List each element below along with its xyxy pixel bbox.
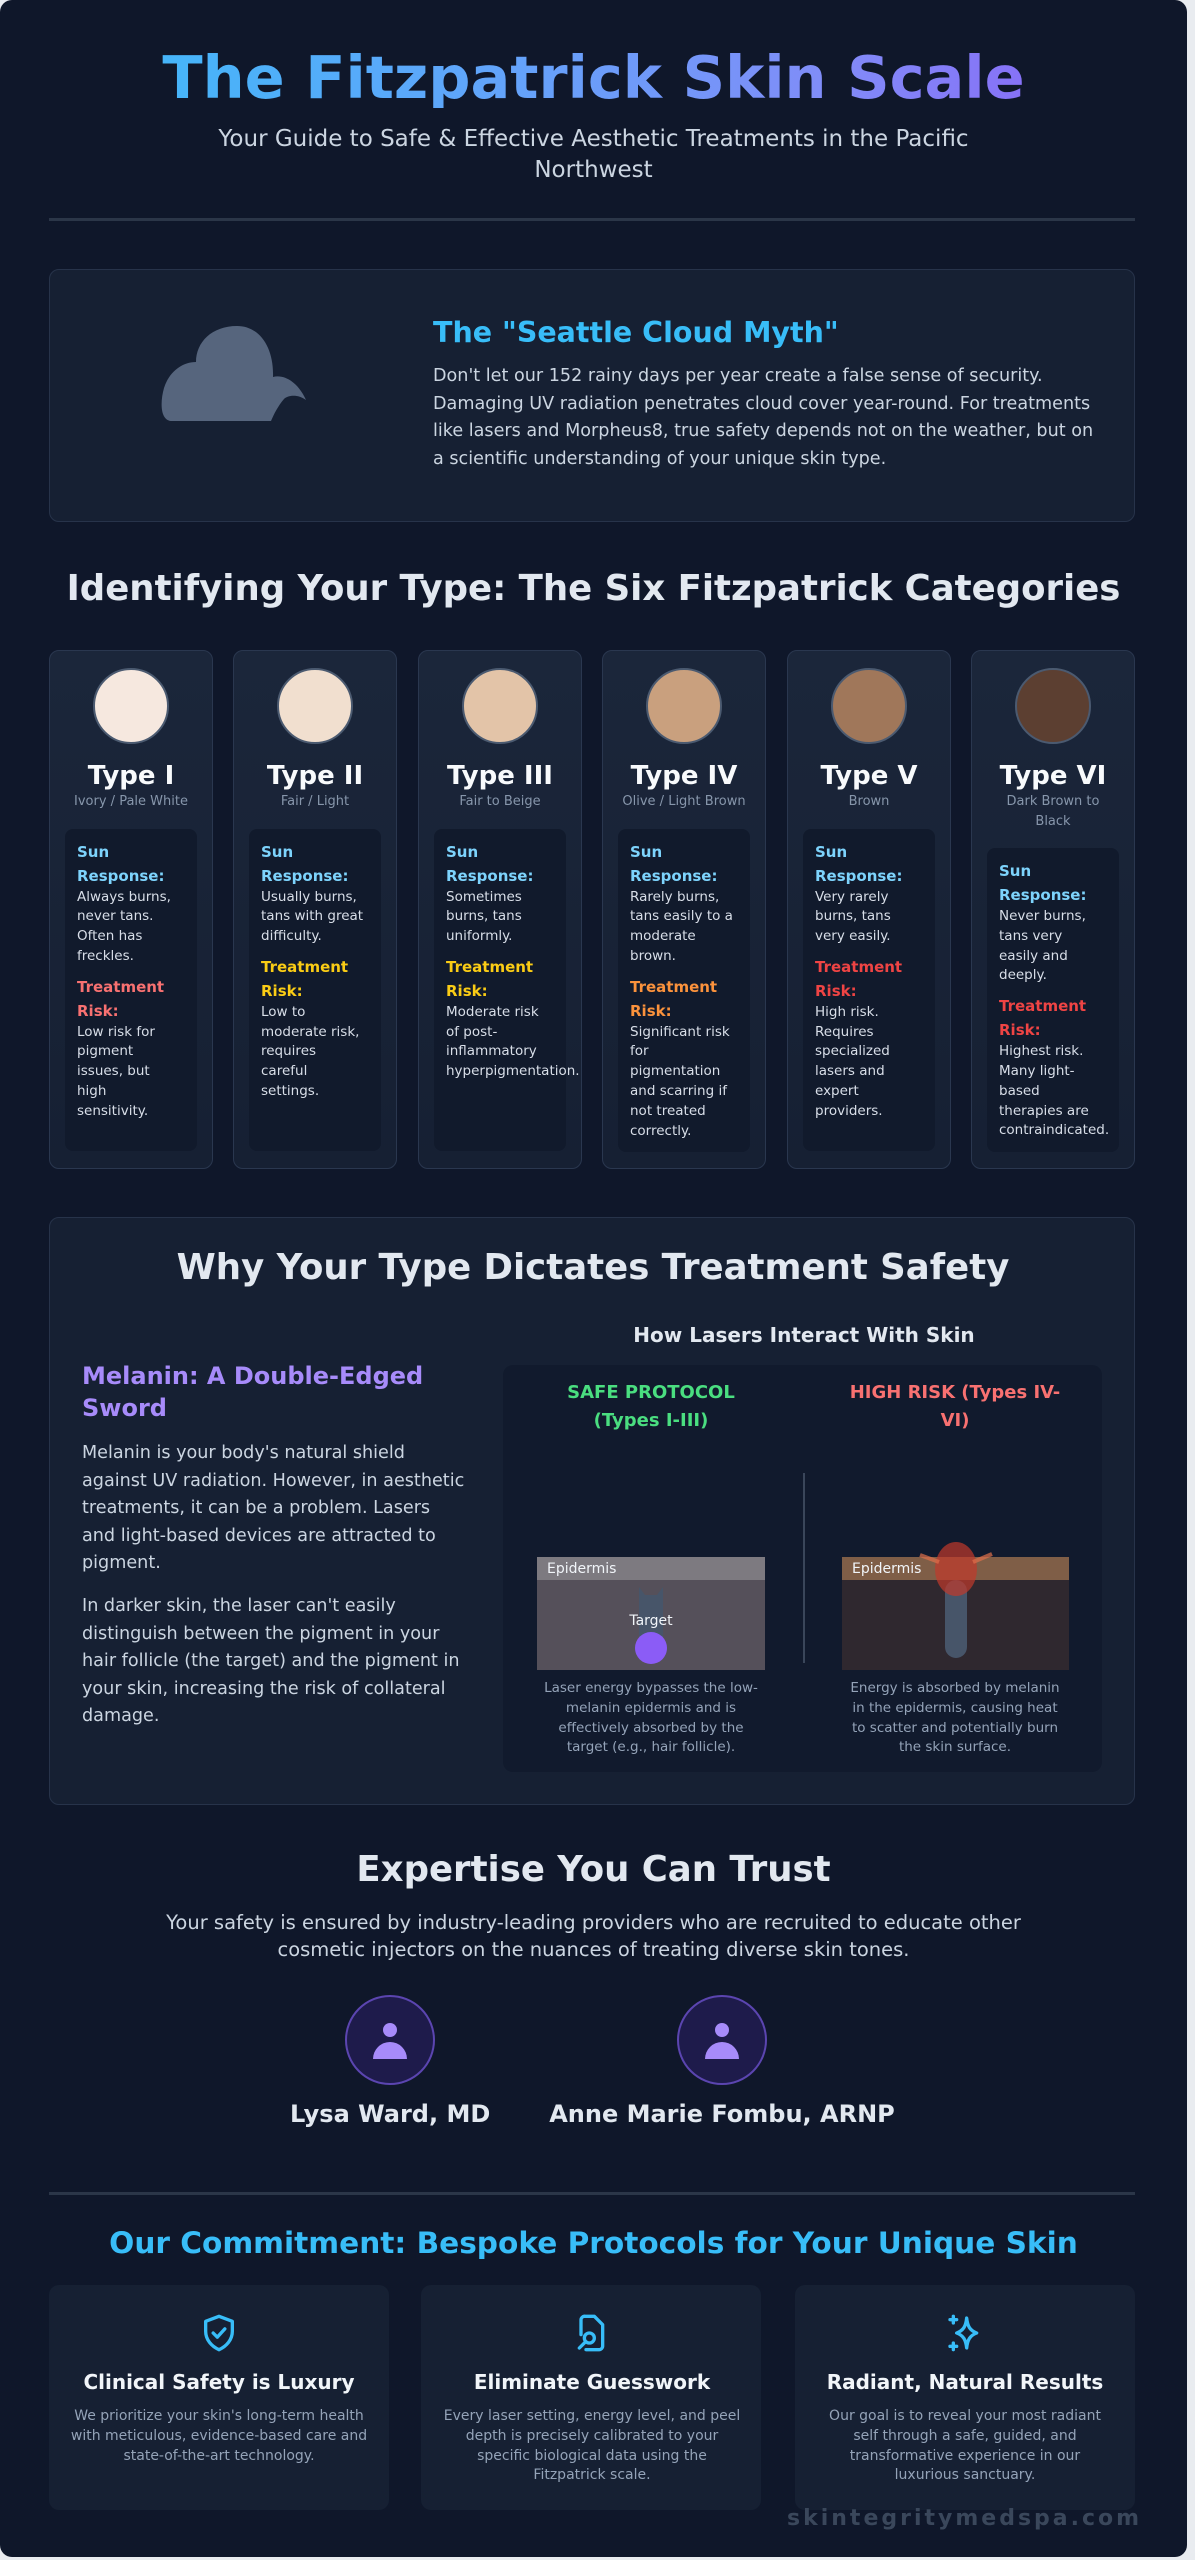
text: melanin paragraph 1: pigment. [82, 1553, 161, 1573]
card: type II [233, 650, 397, 1169]
provider: Lysa Ward [290, 1995, 490, 2128]
card: type VI: based [999, 1083, 1040, 1099]
card: type III: Fair to Beige [459, 794, 541, 809]
card: type II: difficulty. [261, 928, 322, 944]
card: type III: Sun [446, 842, 478, 860]
card: eliminate guesswork: specific biological data using the [477, 2448, 707, 2464]
card: eliminate guesswork: Fitzpatrick scale. [533, 2467, 651, 2483]
provider: Lysa Ward: Lysa Ward, MD [290, 2100, 490, 2128]
card: radiant results: self through a safe, guided, and [853, 2428, 1077, 2444]
card: type VI: therapies are [999, 1103, 1089, 1119]
icon: cloud [162, 326, 306, 421]
label: safe protocol: (Types I-III) [594, 1410, 708, 1431]
card: type IV: correctly. [630, 1123, 691, 1139]
card: type III: Response: [446, 866, 533, 884]
card: type III: Treatment [446, 958, 533, 976]
card: type I: sensitivity. [77, 1103, 148, 1119]
card: type VI: Response: [999, 886, 1086, 904]
icon: sparkles [948, 2314, 978, 2352]
card: type V: burns, tans [815, 908, 891, 924]
label: high risk [850, 1382, 1060, 1431]
title [0, 48, 1187, 108]
watermark: skintegritymedspa.com [787, 2506, 1142, 2531]
card: type V: expert [815, 1083, 859, 1099]
label: high risk: HIGH RISK (Types IV- [850, 1382, 1060, 1403]
label: safe protocol [567, 1382, 735, 1431]
title: The Fitzpatrick Skin Scale [162, 43, 1025, 112]
heading: why your type: Why Your Type Dictates Treatment Safety [177, 1247, 1009, 1288]
card: type IV: for [630, 1043, 649, 1059]
heading: expertise: Expertise You Can Trust [356, 1849, 831, 1890]
card: type VI: easily and [999, 948, 1068, 964]
card: type VI: Never burns, [999, 908, 1086, 924]
heading: melanin [82, 1362, 423, 1422]
text: myth body: a scientific understanding of your unique skin type. [433, 449, 886, 469]
card: type V: Brown [849, 794, 889, 809]
card: type II: Usually burns, [261, 888, 357, 904]
panel: why your type dictates safety [49, 1217, 1135, 1805]
diagram: safe skin: Epidermis [547, 1561, 616, 1577]
card: radiant results: Radiant, Natural Results [827, 2370, 1103, 2394]
card: type III: hyperpigmentation. [446, 1063, 580, 1079]
diagram: safe skin: Target [628, 1613, 673, 1629]
heading: seattle cloud myth: The "Seattle Cloud Myth" [433, 316, 839, 349]
card: type IV: moderate [630, 928, 696, 944]
text: myth body: Damaging UV radiation penetrates cloud cover year-round. For treatments [433, 394, 1090, 414]
card: type III: of post- [446, 1024, 497, 1040]
text: melanin paragraph 2: In darker skin, the laser can't easily [82, 1596, 396, 1616]
text: expertise body: Your safety is ensured by industry-leading providers who are recruited to educate other [166, 1911, 1021, 1934]
card: type II: requires [261, 1043, 316, 1059]
card: type IV: Sun [630, 842, 662, 860]
text: melanin paragraph 2 [82, 1596, 460, 1726]
card: eliminate guesswork: Eliminate Guesswork [474, 2370, 710, 2394]
card: type II: tans with great [261, 908, 363, 924]
card: type IV [602, 650, 766, 1169]
card: type IV: Treatment [630, 978, 717, 996]
card: type IV: Significant risk [630, 1024, 730, 1040]
card: eliminate guesswork [421, 2285, 761, 2510]
card: type IV: tans easily to a [630, 908, 733, 924]
card: type V: providers. [815, 1103, 883, 1119]
heading: how lasers interact: How Lasers Interact With Skin [633, 1323, 975, 1347]
card: type I [49, 650, 213, 1169]
card: type I: freckles. [77, 948, 134, 964]
card: type IV: Response: [630, 866, 717, 884]
text: expertise body [166, 1911, 1021, 1961]
subtitle [218, 126, 969, 183]
card: type VI: Highest risk. [999, 1043, 1083, 1059]
card: type V: Risk: [815, 982, 857, 1000]
card: eliminate guesswork: Every laser setting, energy level, and peel [444, 2408, 740, 2424]
card: type IV: Risk: [630, 1002, 672, 1020]
card: type V: very easily. [815, 928, 891, 944]
card: clinical safety: state-of-the-art technology. [123, 2448, 315, 2464]
text: expertise body: cosmetic injectors on the nuances of treating diverse skin tones. [277, 1938, 910, 1961]
caption: high risk: to scatter and potentially burn [852, 1720, 1058, 1736]
card: type I: Risk: [77, 1002, 119, 1020]
card: clinical safety: with meticulous, evidence-based care and [71, 2428, 367, 2444]
icon: file search [578, 2314, 604, 2352]
card: type II: Fair / Light [281, 794, 349, 809]
caption: high risk: in the epidermis, causing heat [852, 1700, 1058, 1716]
card: type VI: Treatment [999, 997, 1086, 1015]
card: type II: careful [261, 1063, 307, 1079]
card: type VI: Risk: [999, 1021, 1041, 1039]
card: type V: Response: [815, 866, 902, 884]
text: melanin paragraph 2: distinguish between the pigment in your [82, 1624, 439, 1644]
card: type V: specialized [815, 1043, 890, 1059]
caption: high risk: Energy is absorbed by melanin [850, 1680, 1060, 1696]
card: type I: high [77, 1083, 106, 1099]
card: type IV: Olive / Light Brown [622, 794, 746, 809]
card: type VI: deeply. [999, 967, 1047, 983]
text: melanin paragraph 2: your skin, increasing the risk of collateral [82, 1678, 446, 1698]
card: radiant results [795, 2285, 1135, 2510]
card: type I: never tans. [77, 908, 153, 924]
card: type IV: pigmentation [630, 1063, 720, 1079]
heading: melanin: Sword [82, 1394, 167, 1422]
card: type VI: Dark Brown to [1007, 794, 1099, 809]
card: type III: Sometimes [446, 888, 522, 904]
card: type II: Response: [261, 866, 348, 884]
diagram: safe skin [537, 1557, 765, 1670]
card: type V [787, 650, 951, 1169]
label: safe protocol: SAFE PROTOCOL [567, 1382, 735, 1403]
panel: seattle cloud myth [49, 269, 1135, 522]
card: type IV: brown. [630, 948, 676, 964]
card: type I: issues, but [77, 1063, 150, 1079]
heading: six categories: Identifying Your Type: The Six Fitzpatrick Categories [67, 568, 1120, 609]
caption: safe: effectively absorbed by the [558, 1720, 744, 1736]
card: type V: lasers and [815, 1063, 885, 1079]
card: type I: Type I [88, 761, 174, 791]
text: myth body [433, 366, 1093, 469]
card: type III: Moderate risk [446, 1004, 539, 1020]
card: radiant results: luxurious sanctuary. [895, 2467, 1035, 2483]
card: radiant results: transformative experience in our [850, 2448, 1080, 2464]
card: type V: Treatment [815, 958, 902, 976]
card: type II: Low to [261, 1004, 305, 1020]
card: type II: Sun [261, 842, 293, 860]
caption: safe: melanin epidermis and is [566, 1700, 736, 1716]
card: type VI: Black [1035, 814, 1071, 828]
diagram: high risk skin [842, 1542, 1069, 1670]
card: type III: inflammatory [446, 1043, 537, 1059]
card: eliminate guesswork: depth is precisely calibrated to your [466, 2428, 718, 2444]
card: type VI: Type VI [1000, 761, 1106, 791]
icon: avatar [345, 1995, 435, 2085]
provider: Anne Marie Fombu [549, 1995, 895, 2128]
card: type V: Very rarely [815, 888, 888, 904]
text: melanin paragraph 2: hair follicle (the target) and the pigment in [82, 1651, 460, 1671]
card: radiant results: Our goal is to reveal your most radiant [829, 2408, 1101, 2424]
card: type V: Requires [815, 1024, 874, 1040]
caption: safe: target (e.g., hair follicle). [567, 1739, 735, 1755]
card: type II: Treatment [261, 958, 348, 976]
card: type VI: Sun [999, 862, 1031, 880]
diagram: high risk skin: Epidermis [852, 1561, 921, 1577]
card: clinical safety: Clinical Safety is Luxury [83, 2370, 355, 2394]
chart: laser diagram [537, 1382, 1069, 1755]
card: type V: Type V [820, 761, 918, 791]
card: type III: Risk: [446, 982, 488, 1000]
text: melanin paragraph 1: treatments, it can be a problem. Lasers [82, 1498, 430, 1518]
card: type I: pigment [77, 1043, 133, 1059]
text: melanin paragraph 1: against UV radiation. However, in aesthetic [82, 1470, 464, 1490]
card: clinical safety: We prioritize your skin's long-term health [74, 2408, 364, 2424]
card: type IV: Rarely burns, [630, 888, 719, 904]
card: type VI: Many light- [999, 1063, 1075, 1079]
card: type I: Treatment [77, 978, 164, 996]
icon: avatar [677, 1995, 767, 2085]
card: type I: Ivory / Pale White [74, 794, 188, 809]
text: melanin paragraph 2: damage. [82, 1706, 159, 1726]
card: type III [418, 650, 582, 1169]
card: type I: Sun [77, 842, 109, 860]
card: type VI: tans very [999, 928, 1062, 944]
provider: Anne Marie Fombu: Anne Marie Fombu, ARNP [549, 2100, 895, 2128]
card: type III: burns, tans [446, 908, 522, 924]
subtitle: Northwest [534, 157, 653, 183]
card: type IV: Type IV [631, 761, 737, 791]
icon: shield [204, 2314, 234, 2352]
card: type IV: not treated [630, 1103, 706, 1119]
card: type V: Sun [815, 842, 847, 860]
card: type III: uniformly. [446, 928, 512, 944]
card: type II: settings. [261, 1083, 319, 1099]
card: type II: Risk: [261, 982, 303, 1000]
caption: high risk [850, 1680, 1060, 1755]
card: type I: Response: [77, 866, 164, 884]
card: type VI: contraindicated. [999, 1122, 1109, 1138]
card: type I: Low risk for [77, 1024, 155, 1040]
text: myth body: Don't let our 152 rainy days per year create a false sense of security. [433, 366, 1043, 386]
label: high risk: VI) [941, 1410, 969, 1431]
caption: high risk: the skin surface. [899, 1739, 1011, 1755]
card: type I: Always burns, [77, 888, 171, 904]
text: myth body: like lasers and Morpheus8, true safety depends not on the weather, but on [433, 421, 1093, 441]
heading: melanin: Melanin: A Double-Edged [82, 1362, 423, 1390]
text: melanin paragraph 1 [82, 1443, 464, 1573]
caption: safe [544, 1680, 758, 1755]
card: clinical safety [49, 2285, 389, 2510]
caption: safe: Laser energy bypasses the low- [544, 1680, 758, 1696]
card: type II: Type II [267, 761, 363, 791]
subtitle: Your Guide to Safe & Effective Aesthetic Treatments in the Pacific [218, 126, 969, 152]
card: type II: moderate risk, [261, 1024, 359, 1040]
card: type III: Type III [447, 761, 553, 791]
card: type I: Often has [77, 928, 142, 944]
text: melanin paragraph 1: Melanin is your body's natural shield [82, 1443, 405, 1463]
card: type IV: and scarring if [630, 1083, 727, 1099]
card: type V: High risk. [815, 1004, 879, 1020]
heading: commitment: Our Commitment: Bespoke Protocols for Your Unique Skin [109, 2226, 1078, 2260]
text: melanin paragraph 1: and light-based devices are attracted to [82, 1526, 436, 1546]
card: type VI [971, 650, 1135, 1169]
